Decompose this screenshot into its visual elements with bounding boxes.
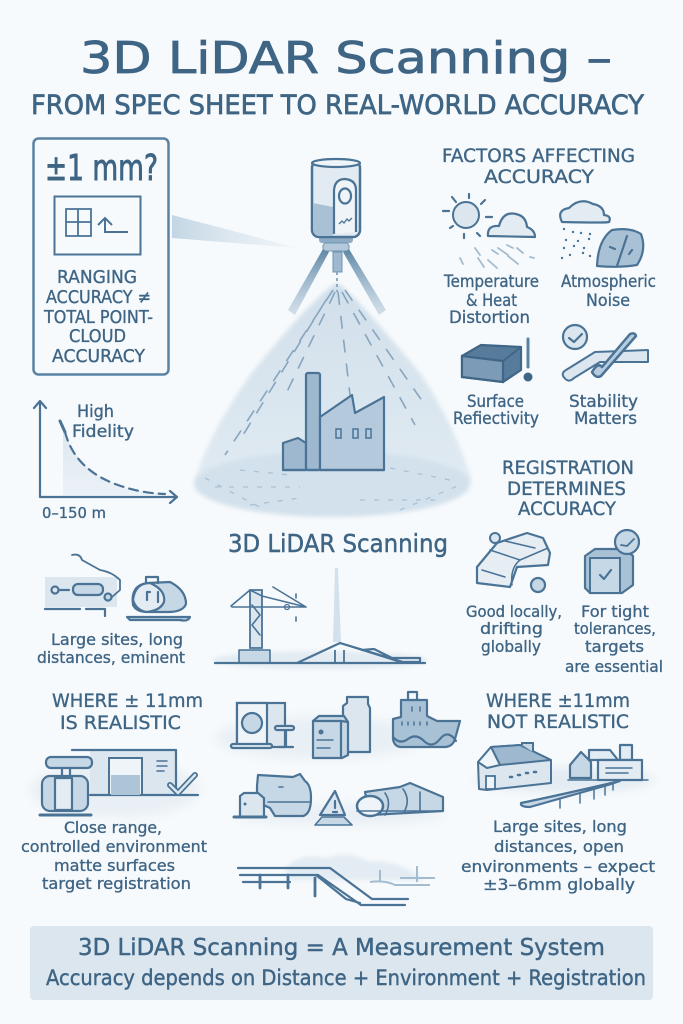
factor labels: Surface: [467, 392, 524, 411]
bottom banner: 3D LiDAR Scanning = A Measurement System: [78, 935, 605, 961]
icon: drifting scan: [477, 533, 550, 592]
bottom banner: [30, 926, 653, 1000]
heading: [502, 458, 634, 520]
registration labels: drifting: [480, 619, 543, 638]
registration labels: [466, 602, 663, 676]
not realistic text: ±3–6mm globally: [483, 875, 635, 894]
icon: target box: [585, 530, 639, 593]
text: large sites left: distances, eminent: [37, 648, 185, 667]
icon: cloud and fog panel: [560, 201, 643, 267]
factor labels: Distortion: [449, 308, 530, 327]
realistic text: controlled environment: [21, 837, 207, 856]
icons: machine, box, ship: [215, 692, 460, 760]
factor labels: [443, 272, 656, 428]
heading: IS REALISTIC: [60, 713, 181, 734]
callout heading: ±1 mm?: [45, 148, 158, 189]
spec sheet icon: [54, 196, 140, 254]
title: 3D LiDAR Scanning –: [80, 33, 612, 84]
icon: crane and bridge: [212, 568, 428, 669]
chart labels: Fidelity: [72, 422, 134, 441]
realistic text: matte surfaces: [54, 856, 175, 875]
callout text: RANGING: [57, 267, 137, 288]
tripod: [288, 249, 386, 315]
registration labels: are essential: [565, 657, 663, 676]
callout text: [43, 267, 153, 367]
registration labels: targets: [585, 637, 644, 656]
registration labels: Good locally,: [466, 602, 562, 621]
realistic text: target registration: [42, 874, 191, 893]
not realistic text: [461, 817, 655, 894]
range chart: [34, 401, 177, 522]
icon: road and bridge: [238, 855, 435, 905]
heading: [486, 691, 630, 733]
beam from callout to scanner: [172, 215, 298, 248]
factor labels: Matters: [574, 409, 637, 428]
factory: [283, 373, 384, 470]
icon: box and bottle: [313, 697, 370, 758]
factor labels: Atmospheric: [561, 272, 656, 291]
factors heading: ACCURACY: [484, 166, 594, 188]
heading: WHERE ±11mm: [486, 691, 630, 712]
heading: ACCURACY: [518, 499, 617, 520]
chart labels: High: [77, 402, 114, 421]
factor labels: Refiectivity: [453, 409, 539, 428]
heading: WHERE ± 11mm: [52, 691, 203, 712]
icon: equipment units: [234, 774, 311, 817]
icon: pipe tunnel: [357, 783, 443, 816]
callout text: ACCURACY: [52, 346, 146, 367]
icon: ship: [393, 692, 460, 747]
icon: warning triangle: [315, 791, 352, 825]
icon: instrument cabinet: [231, 703, 294, 748]
registration labels: globally: [481, 637, 541, 656]
factor labels: Stability: [569, 392, 638, 411]
panel: registration determines accuracy: [466, 458, 663, 676]
scan cone and ground: [194, 283, 472, 517]
heading: [52, 691, 203, 734]
icon: large open site: [475, 743, 655, 808]
not realistic text: environments – expect: [461, 857, 655, 876]
not realistic text: Large sites, long: [493, 817, 627, 836]
factor labels: Temperature: [443, 272, 539, 291]
factor labels: & Heat: [466, 291, 517, 310]
scanner: [312, 159, 360, 251]
heading: NOT REALISTIC: [487, 712, 629, 733]
icon: long range site equipment: [45, 555, 190, 621]
chart labels: [42, 402, 134, 522]
text: large sites left: Large sites, long: [51, 630, 183, 649]
icons: equipment, warning, tunnel: [234, 774, 445, 826]
icon: wrench and check: [563, 325, 648, 381]
callout text: ACCURACY ≠: [46, 287, 151, 308]
factors heading: [442, 145, 635, 188]
realistic text: [21, 818, 207, 893]
heading: DETERMINES: [507, 479, 626, 500]
panel: where ±1 mm is realistic: [21, 691, 207, 893]
chart labels: 0–150 m: [42, 504, 106, 522]
icon: scanner in controlled room: [30, 750, 200, 818]
central label: 3D LiDAR Scanning: [228, 529, 448, 558]
not realistic text: distances, open: [494, 837, 624, 856]
title: FROM SPEC SHEET TO REAL-WORLD ACCURACY: [31, 90, 644, 121]
factor labels: Noise: [586, 291, 630, 310]
registration labels: tolerances,: [574, 619, 656, 638]
title: [31, 33, 644, 121]
icon: sun and cloud: [443, 194, 535, 268]
registration labels: For tight: [581, 602, 649, 621]
panel: where ±1 mm not realistic: [461, 691, 655, 894]
factors heading: FACTORS AFFECTING: [442, 145, 635, 167]
callout text: TOTAL POINT-: [43, 307, 153, 328]
callout text: CLOUD: [69, 326, 126, 347]
callout: ±1 mm spec card: [34, 138, 168, 374]
icon: reflective block: [462, 339, 532, 382]
heading: REGISTRATION: [502, 458, 634, 479]
text: large sites left: [37, 630, 185, 667]
realistic text: Close range,: [64, 818, 162, 837]
panel: factors affecting accuracy: [442, 145, 656, 428]
